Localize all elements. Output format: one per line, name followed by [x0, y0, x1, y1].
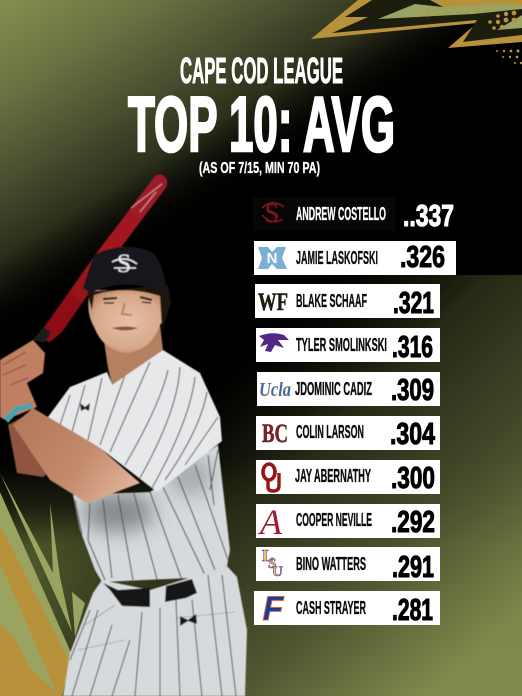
logo: LSU: L	[262, 546, 273, 565]
lightning bolt: top right	[311, 0, 522, 64]
under armour logo	[180, 614, 197, 626]
leaderboard	[253, 197, 456, 628]
row 10: Cash Strayer: CASH STRAYER	[296, 598, 366, 618]
row 8: Cooper Neville	[256, 502, 440, 542]
row 10: Cash Strayer: .281	[392, 592, 433, 627]
row 2: Jamie Laskofski: JAMIE LASKOFSKI	[296, 248, 378, 268]
row 7: Jay Abernathy: JAY ABERNATHY	[295, 466, 371, 486]
under armour chest logo	[80, 403, 90, 411]
row 4: Tyler Smolinkski: TYLER SMOLINKSKI	[296, 335, 387, 355]
row 3: Blake Schaaf: .321	[393, 285, 434, 320]
logo: Kansas State	[259, 333, 289, 352]
wristband	[4, 403, 33, 423]
row 2: Jamie Laskofski: .326	[400, 239, 445, 274]
row 9: Bino Watters: .291	[392, 549, 434, 584]
logo: UCLA: Ucla	[259, 379, 291, 401]
subtitle: (AS OF 7/15, MIN 70 PA)	[199, 160, 320, 177]
logo: LSU: S	[268, 556, 276, 572]
neck	[103, 325, 163, 385]
torso	[73, 445, 230, 590]
jersey shoulders	[48, 350, 222, 492]
logo: Oklahoma	[263, 464, 279, 491]
row 3: Blake Schaaf	[255, 284, 440, 320]
row 7: Jay Abernathy	[256, 460, 440, 495]
row 1: Andrew Costello: ..337	[403, 198, 454, 233]
row 5: Dominic Cadiz	[257, 372, 440, 407]
row 2: Jamie Laskofski	[254, 239, 456, 275]
cap	[83, 247, 166, 293]
row 8: Cooper Neville: COOPER NEVILLE	[296, 510, 372, 530]
head	[87, 285, 171, 353]
row 3: Blake Schaaf: BLAKE SCHAAF	[296, 291, 367, 311]
pants	[63, 566, 247, 696]
icon: halftone dots	[417, 9, 522, 64]
bat	[33, 174, 167, 343]
logo: South Carolina	[262, 198, 284, 228]
logo: Florida: F	[263, 590, 285, 628]
row 6: Colin Larson	[256, 416, 440, 451]
logo: South Carolina: S	[264, 198, 280, 228]
row 9: Bino Watters	[256, 546, 440, 584]
player photo	[0, 174, 247, 696]
row 9: Bino Watters: BINO WATTERS	[296, 554, 366, 574]
cap: S	[117, 249, 131, 278]
hands	[0, 340, 45, 420]
row 1: Andrew Costello: ANDREW COSTELLO	[296, 204, 386, 224]
logo: UNC: N	[267, 250, 277, 267]
lightning bolt: bottom left	[0, 473, 85, 696]
logo: Alabama: A	[258, 502, 283, 542]
row 4: Tyler Smolinkski: .316	[392, 329, 433, 364]
row 5: Dominic Cadiz: JDOMINIC CADIZ	[295, 379, 372, 399]
row 6: Colin Larson: .304	[390, 416, 436, 451]
row 8: Cooper Neville: .292	[391, 504, 435, 539]
row 4: Tyler Smolinkski	[256, 328, 440, 364]
row 7: Jay Abernathy: .300	[391, 460, 435, 495]
logo: Boston College: BC	[262, 419, 288, 448]
near arm	[13, 408, 140, 503]
row 10: Cash Strayer	[254, 590, 440, 628]
logo: Wake Forest: WF	[258, 289, 288, 316]
logo: LSU	[262, 546, 283, 580]
logo: LSU: U	[272, 564, 283, 580]
logo: UNC	[258, 247, 287, 269]
far arm	[8, 410, 52, 477]
row 6: Colin Larson: COLIN LARSON	[296, 422, 364, 442]
text: CAPE COD LEAGUE	[180, 50, 343, 91]
row 1: Andrew Costello	[253, 197, 454, 233]
belt	[103, 579, 197, 607]
row 5: Dominic Cadiz: .309	[391, 372, 434, 407]
